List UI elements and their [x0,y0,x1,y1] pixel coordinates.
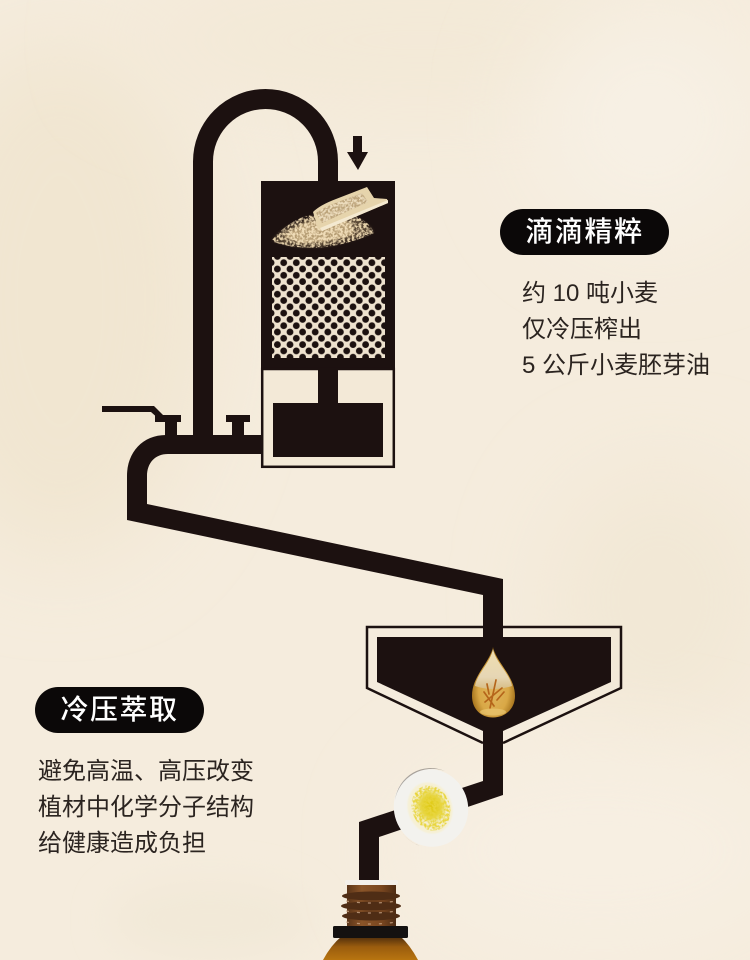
icon: oil capsule bubble [383,759,479,857]
icon: down arrow [347,136,368,170]
wheat grain pile [271,212,374,248]
valve [226,415,250,436]
text block: wheat germ oil yield [522,280,710,379]
pipe: outlet running down to the funnel and bottle [127,435,503,880]
bottle white rim [345,880,398,885]
heading pill: 滴滴精粹: 滴滴精粹 [525,216,644,247]
press lower frame [262,369,394,467]
bottle black collar [333,926,408,938]
press stem [318,368,338,404]
bottle neck threads [341,884,401,926]
heading pill: 冷压萃取: 冷压萃取 [60,694,178,725]
text block: wheat germ oil yield: 约 10 吨小麦 [522,280,658,307]
funnel [367,627,621,745]
valve with lever [102,406,181,436]
press box [261,181,395,467]
press chamber [261,181,395,369]
pipe: arch from base pipe to press box [203,99,328,445]
text block: cold press benefits [38,758,254,857]
text block: cold press benefits: 植材中化学分子结构 [38,794,254,821]
press plate [273,403,383,457]
heading pill: 滴滴精粹 [500,209,669,255]
text block: wheat germ oil yield: 5 公斤小麦胚芽油 [522,352,710,379]
icon: golden oil drop [472,647,515,718]
funnel fill [377,637,611,745]
bottle shoulder [323,936,418,960]
heading pill: 冷压萃取 [35,687,204,733]
bamboo scoop [313,187,388,231]
perforated mesh [272,257,385,358]
text block: wheat germ oil yield: 仅冷压榨出 [522,316,642,343]
funnel outline [367,627,621,743]
text block: cold press benefits: 避免高温、高压改变 [38,758,254,785]
text block: cold press benefits: 给健康造成负担 [38,830,206,857]
amber bottle [323,880,418,960]
